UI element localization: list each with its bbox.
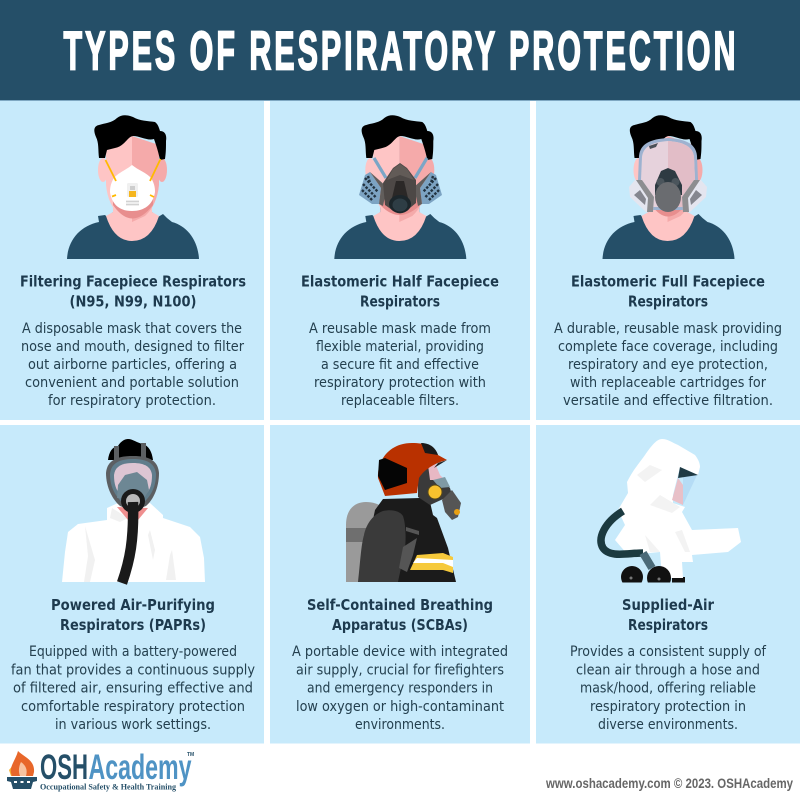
heading xyxy=(301,274,499,310)
description xyxy=(554,321,782,409)
description: comfortable respiratory protection xyxy=(21,699,245,715)
icon: flame on gear xyxy=(7,751,37,789)
heading: Elastomeric Half Facepiece xyxy=(301,274,499,290)
description: respiratory protection in xyxy=(590,699,746,715)
heading: Respirators xyxy=(628,617,708,634)
description: Provides a consistent supply of xyxy=(570,644,767,660)
title: TYPES OF RESPIRATORY PROTECTION xyxy=(64,21,736,82)
description: a secure fit and effective xyxy=(321,357,479,373)
wordmark xyxy=(40,748,194,792)
panel: elastomeric full facepiece respirators xyxy=(536,101,800,420)
description: Equipped with a battery-powered xyxy=(29,644,237,660)
heading: Respirators (PAPRs) xyxy=(60,617,206,634)
heading: Supplied-Air xyxy=(622,597,715,614)
heading: (N95, N99, N100) xyxy=(70,294,196,310)
description: complete face coverage, including xyxy=(558,339,778,355)
icon: person wearing half facepiece respirator xyxy=(334,115,466,259)
heading xyxy=(571,274,765,310)
description: respiratory and eye protection, xyxy=(568,357,768,373)
header banner xyxy=(0,0,800,101)
panel: supplied-air respirators xyxy=(536,425,800,744)
heading: Respirators xyxy=(628,294,708,310)
description: replaceable filters. xyxy=(341,393,459,409)
logo: OSHAcademy xyxy=(7,748,194,792)
description: of filtered air, ensuring effective and xyxy=(13,680,253,696)
wordmark: Academy xyxy=(88,748,192,787)
description: clean air through a hose and xyxy=(576,662,760,678)
description: versatile and effective filtration. xyxy=(563,393,773,409)
description: for respiratory protection. xyxy=(48,393,216,409)
heading xyxy=(307,597,493,634)
description: flexible material, providing xyxy=(316,339,484,355)
description: with replaceable cartridges for xyxy=(570,375,766,391)
heading: Elastomeric Full Facepiece xyxy=(571,274,765,290)
description: convenient and portable solution xyxy=(25,375,239,391)
description xyxy=(292,644,508,733)
heading xyxy=(51,597,215,634)
wordmark: TM xyxy=(187,752,194,758)
heading: Respirators xyxy=(360,294,440,310)
heading: Filtering Facepiece Respirators xyxy=(20,274,246,290)
description: low oxygen or high-contaminant xyxy=(296,699,504,715)
description: in various work settings. xyxy=(55,717,211,733)
heading: Powered Air-Purifying xyxy=(51,597,215,614)
description: fan that provides a continuous supply xyxy=(11,662,255,678)
panel: powered air-purifying respirators xyxy=(0,425,264,744)
icon: person wearing N95 mask xyxy=(67,115,199,259)
description xyxy=(21,321,244,409)
description: out airborne particles, offering a xyxy=(28,357,237,373)
description xyxy=(309,321,491,409)
panel: elastomeric half facepiece respirators xyxy=(270,101,530,420)
description: A reusable mask made from xyxy=(309,321,491,337)
description: environments. xyxy=(355,717,445,733)
description: nose and mouth, designed to filter xyxy=(21,339,244,355)
description xyxy=(11,644,255,733)
description xyxy=(570,644,767,733)
description: and emergency responders in xyxy=(307,680,493,696)
wordmark: OSH xyxy=(40,748,88,787)
icon: worker in white hood with supplied-air hose xyxy=(601,439,741,590)
icon: firefighter with air tank and helmet xyxy=(346,443,461,582)
heading: Apparatus (SCBAs) xyxy=(332,617,468,634)
panel: self-contained breathing apparatus xyxy=(270,425,530,744)
icon: person wearing full facepiece respirator xyxy=(602,115,734,259)
description: air supply, crucial for firefighters xyxy=(296,662,504,678)
description: diverse environments. xyxy=(598,717,738,733)
panel: filtering facepiece respirators xyxy=(0,101,264,420)
heading xyxy=(20,274,246,310)
heading xyxy=(622,597,715,634)
description: A portable device with integrated xyxy=(292,644,508,660)
description: A disposable mask that covers the xyxy=(22,321,242,337)
description: mask/hood, offering reliable xyxy=(580,680,756,696)
wordmark: Occupational Safety & Health Training xyxy=(40,782,177,792)
heading: Self-Contained Breathing xyxy=(307,597,493,614)
description: respiratory protection with xyxy=(314,375,486,391)
icon: worker in white suit with PAPR mask xyxy=(62,439,205,583)
